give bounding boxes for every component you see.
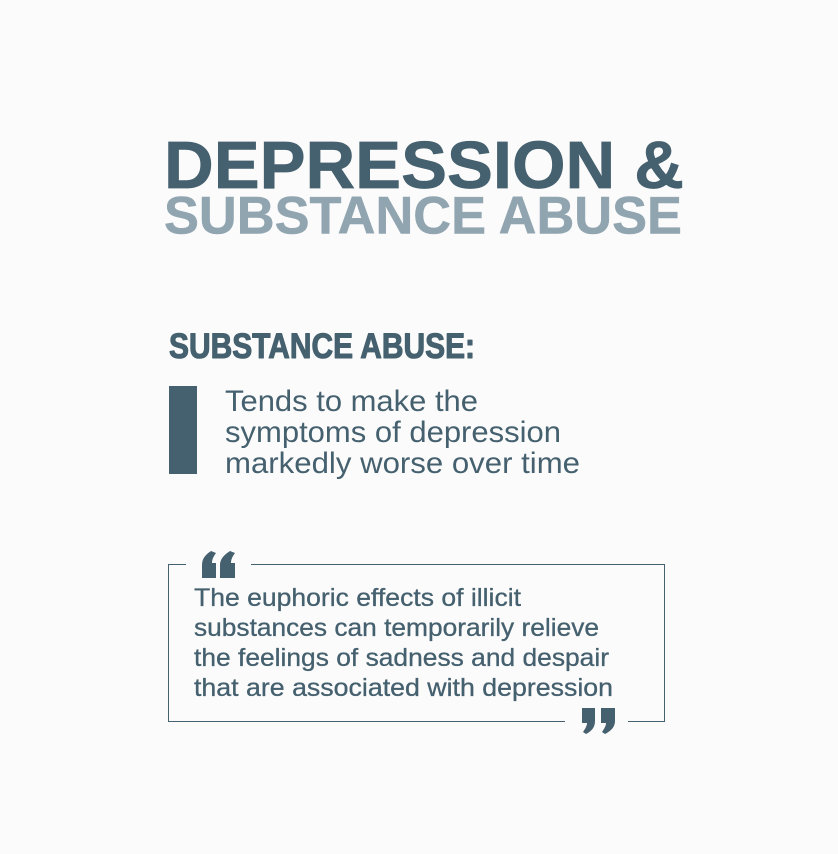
quote text: substances can temporarily relieve (194, 614, 599, 642)
quote text: that are associated with depression (194, 674, 613, 702)
icon: opening quote mark (202, 551, 235, 578)
quote text: the feelings of sadness and despair (194, 644, 609, 672)
body text: Tends to make the (225, 385, 478, 418)
accent bar (169, 386, 197, 474)
quote box frame (168, 564, 664, 722)
body text: markedly worse over time (225, 447, 580, 480)
subtitle: Substance Abuse: SUBSTANCE ABUSE (164, 186, 682, 246)
title: Depression &: DEPRESSION & (164, 128, 684, 203)
body text (225, 385, 580, 480)
body text: symptoms of depression (225, 416, 561, 449)
icon: closing quote mark (582, 708, 615, 734)
quote text (194, 584, 613, 702)
section heading: SUBSTANCE ABUSE: (169, 326, 475, 366)
quote text: The euphoric effects of illicit (194, 584, 521, 612)
